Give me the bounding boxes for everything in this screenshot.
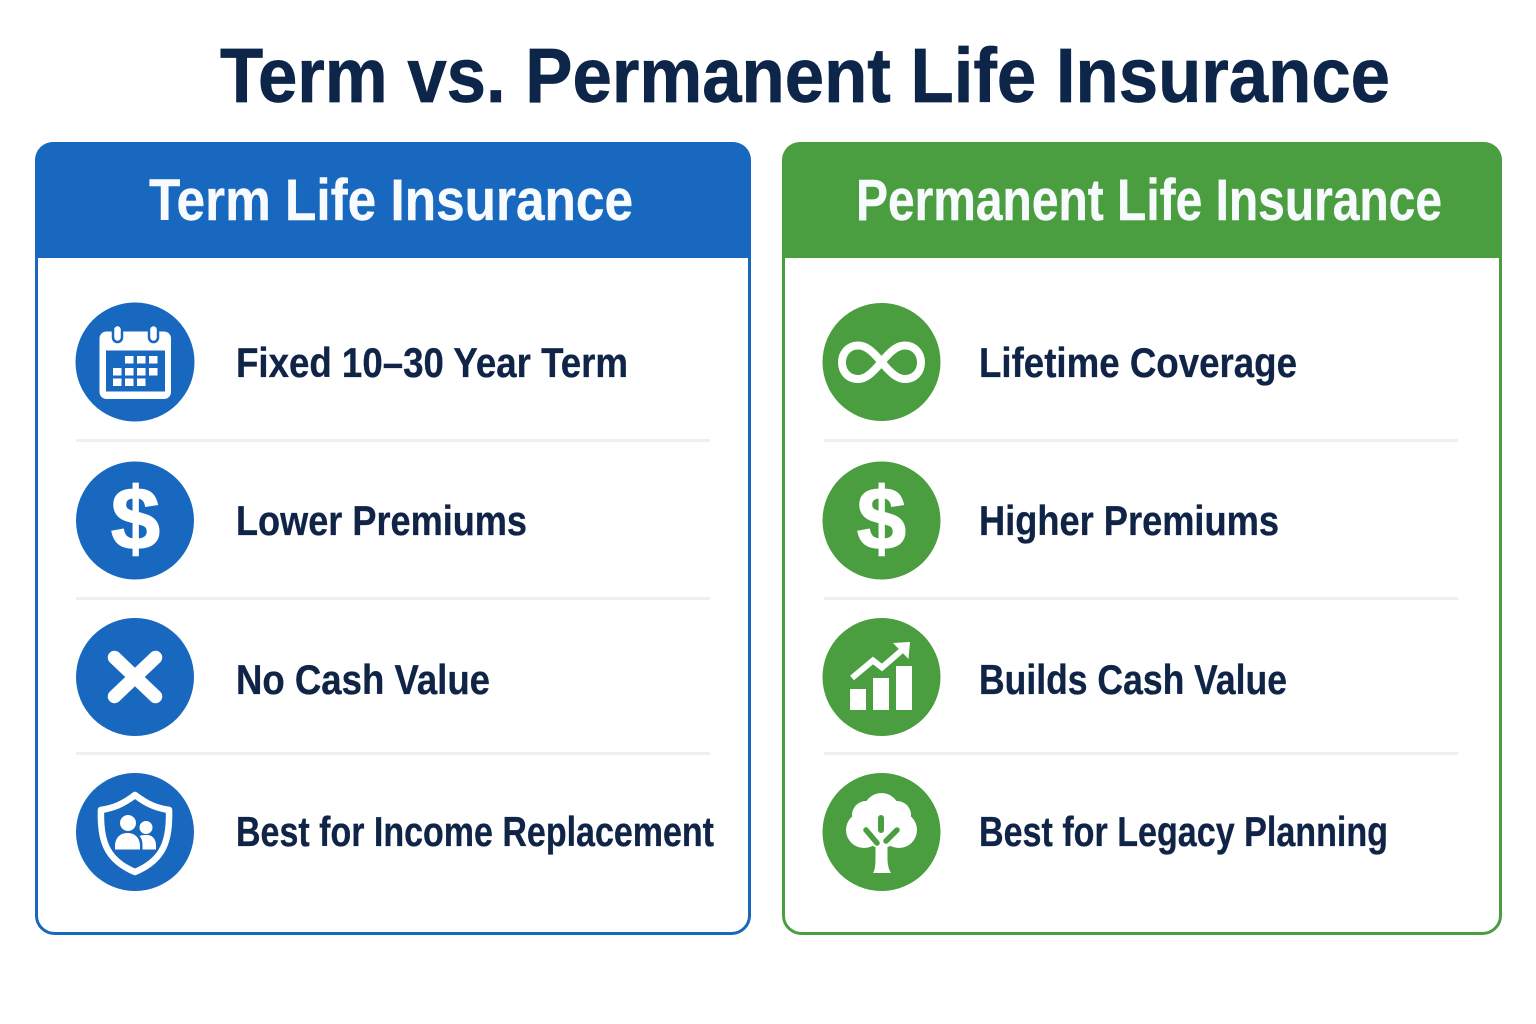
title: Term vs. Permanent Life Insurance <box>220 33 1390 119</box>
icon: tree <box>822 773 940 891</box>
text: higher premiums: Higher Premiums <box>979 497 1279 544</box>
text: no cash value: No Cash Value <box>236 656 490 703</box>
panel: permanent life insurance <box>782 142 1502 934</box>
text: builds cash value: Builds Cash Value <box>979 656 1287 703</box>
icon: x mark <box>76 618 194 736</box>
icon: calendar <box>76 302 194 422</box>
text: legacy planning: Best for Legacy Planning <box>979 808 1388 855</box>
text: fixed term: Fixed 10–30 Year Term <box>236 339 628 386</box>
text: lifetime coverage: Lifetime Coverage <box>979 339 1297 386</box>
icon: dollar: $ <box>111 469 160 568</box>
icon: dollar: $ <box>857 469 906 568</box>
icon: shield with family <box>76 773 194 891</box>
panel: term life insurance <box>35 142 751 934</box>
icon: dollar <box>822 462 940 580</box>
text: income replacement: Best for Income Replacement <box>236 808 714 855</box>
heading: term life insurance: Term Life Insurance <box>149 168 633 233</box>
icon: dollar <box>76 462 194 580</box>
icon: growth chart <box>822 618 940 736</box>
text: lower premiums: Lower Premiums <box>236 497 527 544</box>
icon: infinity <box>822 303 940 421</box>
